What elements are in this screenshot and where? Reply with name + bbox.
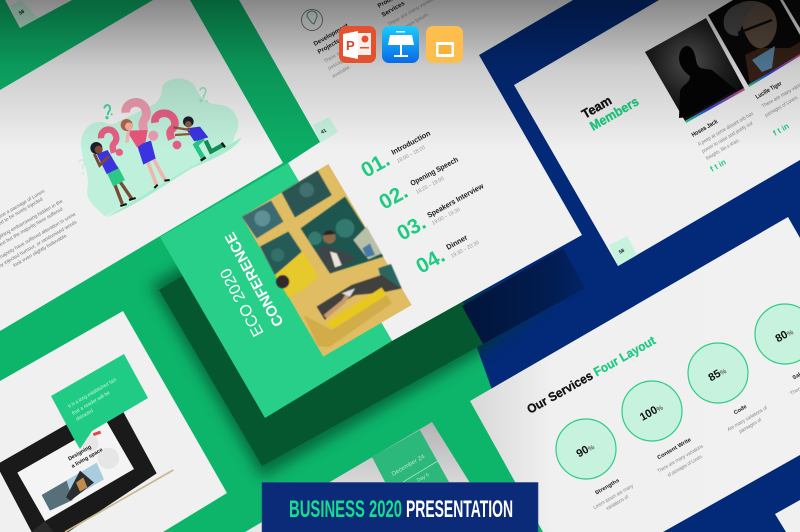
agenda item 2: 02.	[375, 180, 412, 214]
development column	[302, 10, 357, 80]
bio: Hosea Jack: power to raise and purify our	[701, 120, 754, 155]
icon: Google Slides	[426, 26, 463, 63]
slide: bottom center timeline	[328, 422, 470, 484]
dark green shadow block	[159, 265, 483, 466]
bio: Lucille Tiger: f t in	[772, 121, 791, 138]
slide: top-left corner fragment: 58	[18, 9, 26, 17]
photo: Hosea Jack	[645, 18, 745, 123]
top shading overlay	[0, 0, 800, 150]
callout: speech bubble: It is a long established fact	[67, 377, 118, 410]
banner: business 2020 presentation	[262, 482, 538, 532]
service: strengths 90%: Strengths	[594, 478, 621, 496]
agenda item 2: Opening Speech	[409, 155, 460, 188]
agenda item 1: Introduction	[390, 128, 432, 157]
agenda item 4: 04.	[412, 244, 449, 278]
soft shadow behind cover	[150, 255, 575, 478]
page number 41: 41	[320, 128, 328, 136]
banner: business 2020 presentation: BUSINESS 2020	[289, 496, 402, 523]
green band between slides	[190, 0, 320, 165]
agenda item 1: 01.	[357, 148, 394, 182]
production column: of Lorem Ipsum.	[396, 11, 430, 35]
service: code 85%: Code	[733, 404, 748, 416]
bottom-left white sliver	[245, 522, 262, 532]
production column: Services	[380, 0, 407, 19]
agenda item 3: Speakers Interview	[426, 181, 485, 220]
service: content write 100%: of passages of Lorem.	[667, 454, 704, 479]
heading: team members: Members	[587, 94, 641, 134]
bio: Hosea Jack: f t in	[708, 157, 728, 174]
slide: question illustration	[0, 0, 283, 331]
slide: bottom center timeline: Day 5	[416, 472, 431, 484]
illustration: people and question marks	[79, 79, 242, 217]
service: code 85%	[688, 343, 769, 435]
agenda item 3	[393, 181, 485, 245]
agenda item 4: Dinner	[445, 233, 469, 252]
development column: Development	[312, 22, 350, 48]
slide: laptop	[0, 311, 227, 532]
service: strengths 90%	[556, 419, 635, 512]
development column: available.	[331, 64, 352, 80]
slide: bottom center timeline: December 24	[391, 454, 427, 478]
page number 58	[609, 236, 637, 266]
agenda item 1: 18:00 – 18:20	[396, 145, 426, 165]
service: code 85%: passages of	[738, 417, 763, 435]
development column: Projects	[316, 37, 342, 56]
slide: services	[470, 217, 800, 532]
agenda item 3: 19:00 – 19:30	[431, 207, 461, 227]
page number 41	[313, 117, 338, 143]
service: strengths 90%: variations of	[605, 494, 630, 512]
service: strengths 90%: Lorem ipsum are many	[593, 483, 635, 511]
development column: There are many	[323, 42, 357, 65]
slide: team members	[514, 0, 800, 266]
bio: Lucille Tiger	[754, 74, 800, 138]
icon: PowerPoint	[339, 26, 376, 63]
cover title: ECO 2020 CONFERENCE: ECO 2020	[217, 265, 268, 339]
agenda item 4	[412, 233, 480, 278]
icon: PowerPoint: P	[346, 38, 355, 53]
heading: our services four layout: Our Services Four Layout	[525, 333, 659, 417]
photo: Lucille Tiger	[708, 0, 800, 87]
service: fourth 80%	[755, 304, 800, 397]
agenda item 1	[357, 128, 432, 182]
laptop mockup	[0, 397, 173, 532]
slide: bottom-right corner fragment	[775, 500, 800, 532]
laptop mockup: Designing	[67, 444, 93, 462]
agenda item 2: 18:20 – 19:00	[415, 176, 445, 196]
callout: speech bubble	[51, 354, 148, 449]
cover photo: office window	[242, 164, 412, 357]
heading: team members: Team	[579, 93, 614, 122]
bio: Hosea Jack: A peep at some distant orb has	[697, 111, 755, 148]
slide: top-left corner fragment	[5, 0, 72, 28]
service: strengths 90%: 90%	[574, 440, 597, 460]
callout: speech bubble: distracted.	[75, 408, 95, 423]
slide: agenda	[239, 0, 582, 341]
dark navy shadow block	[462, 248, 585, 344]
body text: question slide	[0, 189, 78, 269]
photo: third portrait edge	[783, 0, 800, 28]
banner: business 2020 presentation: PRESENTATION	[406, 496, 513, 523]
cover: green conference panel	[160, 163, 392, 418]
body text: question slide: by injected humour, or randomised words	[0, 219, 78, 269]
service: content write 100%	[622, 381, 705, 479]
laptop mockup: a living space	[71, 447, 104, 470]
service: fourth 80%: 80%	[773, 325, 796, 345]
service: code 85%: Are many variations of	[727, 405, 769, 433]
bio: Hosea Jack	[690, 111, 755, 174]
page number 58: 58	[618, 248, 626, 256]
bio: Lucille Tiger: Lucille Tiger	[754, 80, 784, 101]
agenda item 2	[375, 155, 460, 214]
cover title: ECO 2020 CONFERENCE: CONFERENCE	[222, 229, 287, 329]
service: code 85%: 85%	[706, 364, 729, 384]
service: content write 100%: 100%	[638, 401, 666, 424]
agenda item 3: 03.	[393, 211, 430, 245]
bio: Hosea Jack: Hosea Jack	[690, 118, 720, 139]
bio: Hosea Jack: thoughts. like a strain.	[705, 138, 741, 162]
callout: speech bubble: that a reader will be	[71, 390, 111, 417]
icon: Keynote	[382, 26, 419, 63]
production column	[376, 0, 441, 35]
body text: question slide: look even slightly believable.	[12, 233, 69, 269]
development column: passages of	[327, 53, 354, 72]
agenda item 4: 19:30 – 20:30	[450, 240, 480, 260]
service: content write 100%: There are many variations	[656, 443, 705, 475]
background: navy field	[462, 0, 800, 532]
service: content write 100%: Content Write	[657, 437, 692, 461]
